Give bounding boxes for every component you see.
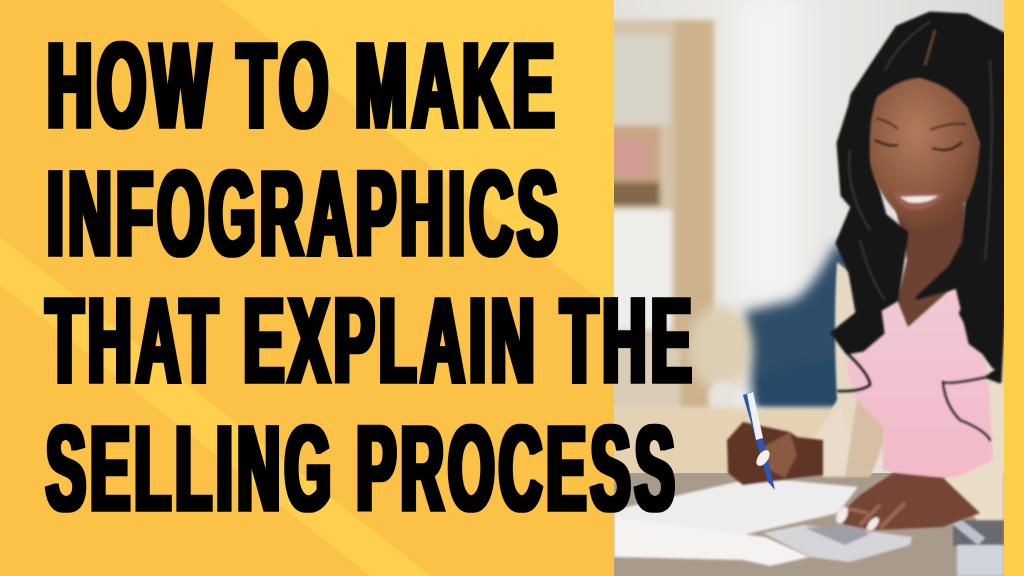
- title: HOW TO MAKE: [47, 17, 559, 153]
- blurred room background: [614, 0, 1004, 473]
- items bottom right: [950, 517, 1004, 576]
- table: [614, 473, 1004, 576]
- photo: woman at desk doing calculations: [600, 0, 1010, 576]
- right hand on calculator: [834, 473, 980, 533]
- pen: [743, 392, 775, 490]
- title: [46, 17, 696, 536]
- left hand holding pen: [727, 422, 823, 485]
- pink top: [847, 290, 994, 478]
- hair: [832, 13, 1010, 440]
- face: [870, 78, 980, 233]
- cardigan: [812, 262, 1004, 520]
- calculator: [763, 525, 912, 562]
- neck: [895, 205, 965, 327]
- papers: [614, 480, 858, 566]
- fingernail: [756, 450, 770, 466]
